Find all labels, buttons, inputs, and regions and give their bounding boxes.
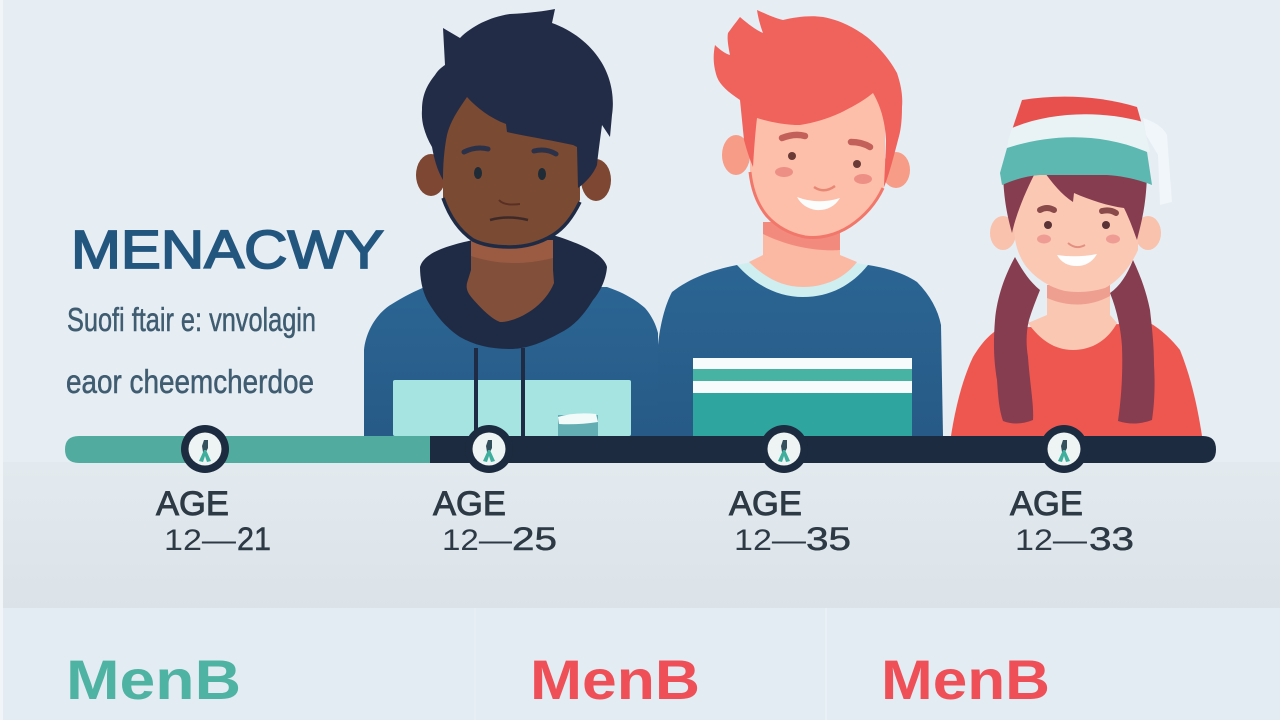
marker: first age [181,425,229,473]
age label: second [433,485,557,557]
face [443,90,580,247]
facial features [464,148,556,220]
ears [990,216,1016,250]
hood [420,235,607,349]
timeline bar [65,425,1216,473]
neck [467,240,554,322]
beard line [443,198,580,247]
marker: fourth age [1040,425,1088,473]
text block: description [66,301,316,400]
chest stripes [693,358,912,436]
sweater body [658,265,943,436]
face [1014,170,1138,292]
laptop [393,380,631,436]
hair [1003,170,1147,240]
sweater body [951,323,1202,436]
facial features [775,135,872,210]
age label: fourth [1010,485,1134,557]
age label: fourth: 12— [1015,524,1087,557]
title: MENACWY [71,220,384,280]
age label: first: AGE [156,485,229,523]
hat [1000,97,1172,205]
age label: fourth: AGE [1010,485,1083,523]
neck [1028,285,1117,350]
vaccine label: red MenB: MenB [530,648,700,711]
ears [722,135,750,175]
hair [422,9,613,188]
hair [714,10,902,187]
age label: first: 12— [164,524,236,557]
person: girl with hat [951,97,1202,436]
age label: second: 12— [442,524,512,557]
neck and collar [737,262,868,297]
text block: description: eaor cheemcherdoe [66,363,314,400]
marker: second age [465,425,513,473]
braids [994,257,1155,424]
face [750,85,885,238]
age label: third: 12— [734,524,806,557]
facial features [1037,208,1120,266]
person: boy with red hair [658,10,943,436]
age label: second: 25 [512,521,557,557]
age label: third [729,485,851,557]
person: boy with dark hair [364,9,658,436]
age label: first [156,485,271,557]
hoodie body [364,287,658,436]
age label: third: 35 [806,521,851,557]
text block: description: Suofi ftair e: vnvolagin [67,301,316,338]
age label: first: 21 [237,521,271,557]
age label: second: AGE [433,485,506,523]
age label: fourth: 33 [1089,521,1134,557]
ears [416,154,446,196]
vaccine label: red MenB: MenB [881,648,1050,711]
vaccine label: teal MenB: MenB [66,648,241,711]
age label: third: AGE [729,485,802,523]
marker: third age [760,425,808,473]
hoodie strings [476,348,523,436]
